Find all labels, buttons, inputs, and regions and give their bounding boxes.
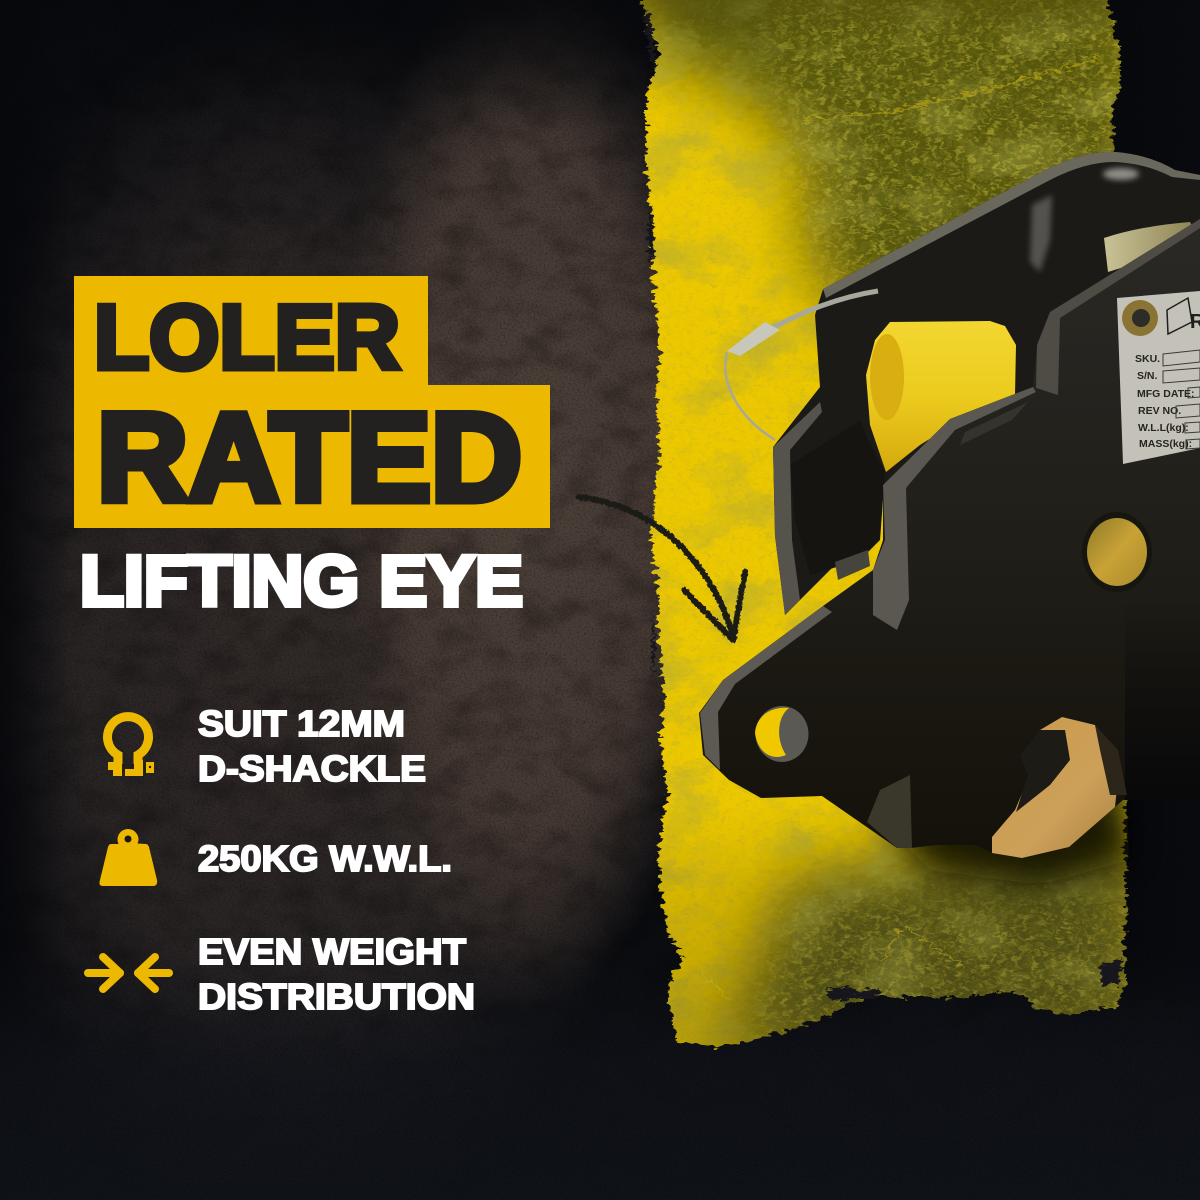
panel: yellow brush paint swatch bbox=[639, 0, 1130, 1050]
icon: weight bbox=[99, 829, 157, 886]
text: weight distribution bbox=[198, 931, 475, 1017]
lanyard wire bbox=[725, 291, 878, 440]
icon: D-shackle bbox=[107, 717, 154, 776]
front main body bbox=[699, 219, 1200, 858]
text: shackle size: SUIT 12MM bbox=[198, 703, 405, 744]
text: weight distribution: EVEN WEIGHT bbox=[198, 931, 466, 972]
identification plate bbox=[1117, 291, 1200, 464]
back plate inner recess bbox=[790, 420, 885, 575]
weld shine bbox=[960, 402, 1028, 445]
chamfered edge highlights bbox=[873, 387, 1036, 630]
shadow under the product bbox=[880, 780, 1130, 885]
text: working load: 250KG W.W.L. bbox=[198, 838, 452, 879]
text: shackle size: D-SHACKLE bbox=[198, 748, 426, 789]
heading: RATED: RATED bbox=[97, 388, 522, 528]
identification plate: MFG DATE: bbox=[1137, 388, 1195, 400]
text: shackle size bbox=[198, 703, 426, 789]
heading block: LOLER RATED yellow label bbox=[74, 276, 550, 528]
text: weight distribution: DISTRIBUTION bbox=[198, 976, 475, 1017]
back plate bbox=[773, 152, 1200, 615]
bottom reflection bbox=[867, 775, 912, 848]
identification plate: S/N. bbox=[1137, 370, 1158, 382]
icon: opposing arrows bbox=[88, 957, 169, 989]
identification plate: W.L.L(kg): bbox=[1138, 422, 1189, 434]
product photo: quick hitch with lifting eye bbox=[699, 152, 1200, 858]
identification plate: SKU. bbox=[1135, 353, 1160, 365]
yellow cylinder bbox=[866, 321, 1016, 472]
feature: working load bbox=[99, 829, 452, 886]
lower bore with crescent bbox=[992, 717, 1120, 858]
lifting eye hole bbox=[756, 706, 808, 762]
subheading: LIFTING EYE: LIFTING EYE bbox=[80, 542, 523, 622]
heading: LOLER: LOLER bbox=[94, 288, 400, 388]
dark paint scratches along swatch edges bbox=[644, 12, 1122, 1000]
gold pin bbox=[1082, 512, 1152, 592]
identification plate: REV NO. bbox=[1138, 405, 1181, 417]
identification plate: MASS(kg): bbox=[1139, 438, 1192, 450]
arrow: hand-drawn pointing to lifting eye bbox=[579, 497, 745, 640]
feature: shackle size bbox=[107, 703, 426, 789]
feature: weight distribution bbox=[88, 931, 475, 1017]
upper pin bbox=[1104, 222, 1200, 272]
